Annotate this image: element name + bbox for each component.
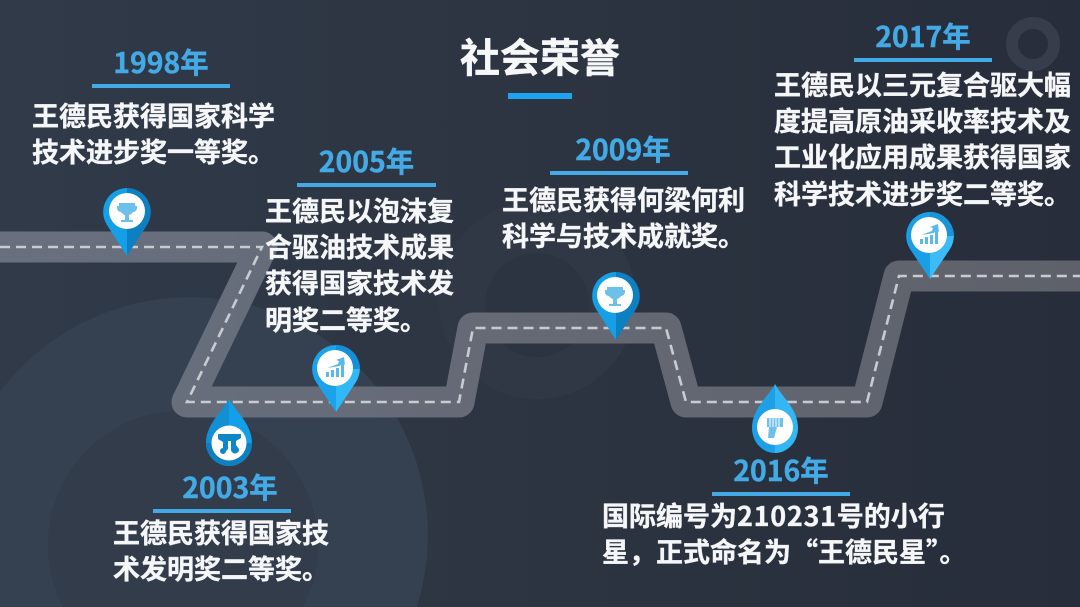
- text 2017: 王德民以三元复合驱大幅: [774, 64, 1071, 103]
- text 2003: [113, 512, 329, 587]
- text 2016: 国际编号为210231号的小行: [602, 495, 945, 534]
- title: 社会荣誉: [460, 26, 620, 84]
- text 2005: 明奖二等奖。: [265, 299, 427, 338]
- year 2016: [712, 449, 850, 496]
- year 1998: [92, 41, 230, 88]
- text 2003: 术发明奖二等奖。: [113, 548, 329, 587]
- year 2017: [854, 15, 992, 62]
- road: [0, 247, 1080, 402]
- text 2017: 度提高原油采收率技术及: [774, 100, 1071, 139]
- text 2017: 科学技术进步奖二等奖。: [774, 173, 1071, 212]
- pin 1998: trophy: [103, 188, 151, 256]
- pin 2003: pipes: [206, 399, 252, 466]
- text 2005: [265, 190, 454, 338]
- pin 2016: drill: [752, 384, 798, 453]
- pin 2005: growth chart: [312, 345, 360, 412]
- year 2009: [550, 128, 688, 175]
- text 2009: [502, 179, 745, 254]
- text 2016: 星，正式命名为“王德民星”。: [602, 531, 966, 570]
- text 2017: 工业化应用成果获得国家: [774, 136, 1071, 175]
- year 2009: 2009年: [575, 128, 671, 169]
- year 1998: 1998年: [113, 41, 209, 82]
- text 2005: 获得国家技术发: [265, 262, 454, 301]
- year 2003: 2003年: [182, 466, 278, 507]
- text 2009: 王德民获得何梁何利: [502, 179, 745, 218]
- text 2016: [602, 495, 966, 570]
- pin 2017: growth chart: [906, 212, 954, 279]
- text 2005: 王德民以泡沫复: [265, 190, 454, 229]
- text 1998: [32, 95, 275, 170]
- text 2005: 合驱油技术成果: [265, 226, 454, 265]
- year 2003: [153, 466, 291, 513]
- text 1998: 技术进步奖一等奖。: [32, 131, 275, 170]
- year 2005: 2005年: [319, 140, 414, 181]
- text 2003: 王德民获得国家技: [113, 512, 329, 551]
- year 2005: [297, 140, 436, 187]
- year 2017: 2017年: [875, 15, 971, 56]
- pin 2009: trophy: [592, 272, 640, 340]
- text 1998: 王德民获得国家科学: [32, 95, 275, 134]
- year 2016: 2016年: [733, 449, 829, 490]
- text 2009: 科学与技术成就奖。: [502, 215, 745, 254]
- title underline: [508, 93, 572, 99]
- text 2017: [774, 64, 1071, 212]
